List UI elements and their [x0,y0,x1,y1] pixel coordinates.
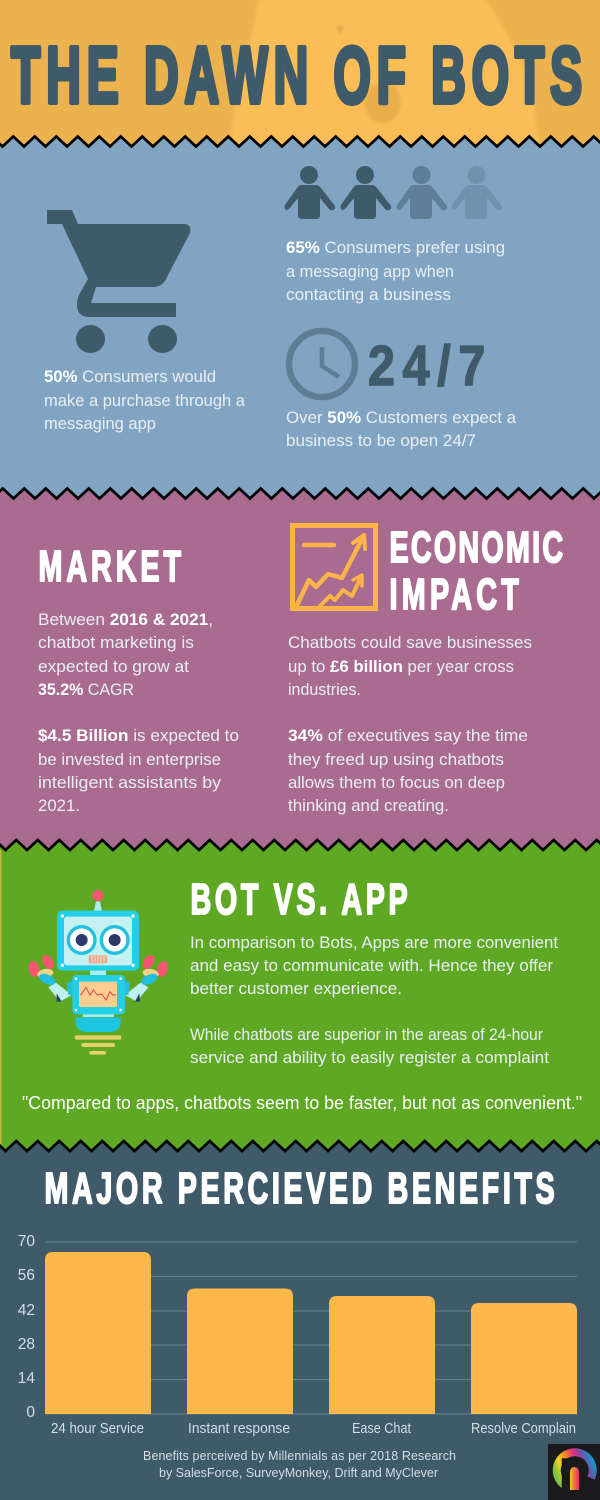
text: market growth: expected to grow at [38,658,189,676]
y axis labels: 0 [26,1404,35,1421]
y axis labels: 14 [18,1370,35,1387]
text: market growth: Between 2016 & 2021, [38,611,213,629]
text: market investment: 2021. [38,797,80,815]
heading: economic impact [390,523,563,618]
bar chart [18,1233,577,1437]
text: 50% purchase: make a purchase through a [44,392,246,410]
text: 50% purchase [44,368,246,433]
bars [45,1252,577,1414]
x axis labels: Resolve Complain [471,1421,576,1437]
text: market investment: be invested in enterprise [38,751,221,769]
text: apps comparison [190,934,558,998]
text: 24/7: 24/7 [368,334,485,398]
text: market growth [38,611,213,699]
footer source note: by SalesForce, SurveyMonkey, Drift and MyClever [159,1466,438,1480]
icon: shopping cart [47,210,190,353]
text: chatbots comparison: While chatbots are superior in the areas of 24-hour [190,1026,543,1044]
quote: "Compared to apps, chatbots seem to be faster, but not as convenient." [22,1093,582,1113]
panel: market and economic impact [0,497,600,851]
icon: clock [289,331,355,397]
title: THE DAWN OF BOTS [11,30,582,119]
text: market investment [38,727,239,815]
panel: major perceived benefits [0,1151,600,1500]
panel: consumer messaging stats [0,146,600,498]
x axis labels [51,1421,576,1437]
footer source note: Benefits perceived by Millennials as per 2018 Research [143,1449,456,1463]
heading: economic impact: ECONOMIC [390,523,563,571]
y axis labels: 42 [18,1302,35,1319]
heading: market: MARKET [38,542,181,590]
text: apps comparison: and easy to communicate with. Hence they offer [190,957,554,975]
text: 65% messaging: 65% Consumers prefer using [286,239,505,257]
y axis labels: 28 [18,1336,35,1353]
footer source note [143,1449,456,1480]
text: market growth: 35.2% CAGR [38,681,134,699]
x axis labels: Ease Chat [352,1421,411,1437]
text: apps comparison: In comparison to Bots, Apps are more convenient [190,934,558,952]
text: executives: thinking and creating. [288,797,449,815]
x axis labels: 24 hour Service [51,1421,144,1437]
text: savings: industries. [288,681,361,699]
y axis labels: 70 [18,1233,35,1250]
text: 50% open [286,409,517,450]
text: chatbots comparison [190,1026,549,1067]
text: 50% purchase: 50% Consumers would [44,368,216,386]
text: 65% messaging: a messaging app when [286,263,454,281]
icon: logo [548,1444,600,1500]
text: 65% messaging [286,239,505,304]
y axis labels [18,1233,35,1421]
text: executives: they freed up using chatbots [288,751,504,769]
heading: bot vs app: BOT VS. APP [190,875,408,923]
text: market growth: chatbot marketing is [38,634,194,652]
text: 50% open: Over 50% Customers expect a [286,409,517,427]
text: 65% messaging: contacting a business [286,286,451,304]
heading: economic impact: IMPACT [390,570,519,618]
icon: growth chart [292,526,376,608]
panel: bot vs app [0,850,600,1150]
icon: robot [27,890,170,1055]
y axis labels: 56 [18,1267,35,1284]
text: executives: allows them to focus on deep [288,774,505,792]
text: executives [288,727,528,815]
heading: benefits: MAJOR PERCIEVED BENEFITS [44,1164,555,1212]
text: savings [288,634,532,699]
text: savings: Chatbots could save businesses [288,634,532,652]
text: 50% purchase: messaging app [44,415,156,433]
text: market investment: intelligent assistants by [38,774,222,792]
icon: people 65% [284,166,502,219]
text: chatbots comparison: service and ability to easily register a complaint [190,1049,549,1067]
text: market investment: $4.5 Billion is expected to [38,727,239,745]
text: 50% open: business to be open 24/7 [286,432,476,450]
x axis labels: Instant response [188,1421,290,1437]
text: executives: 34% of executives say the time [288,727,528,745]
text: savings: up to £6 billion per year cross [288,658,514,676]
text: apps comparison: better customer experience. [190,980,402,998]
panel: header [0,0,600,150]
